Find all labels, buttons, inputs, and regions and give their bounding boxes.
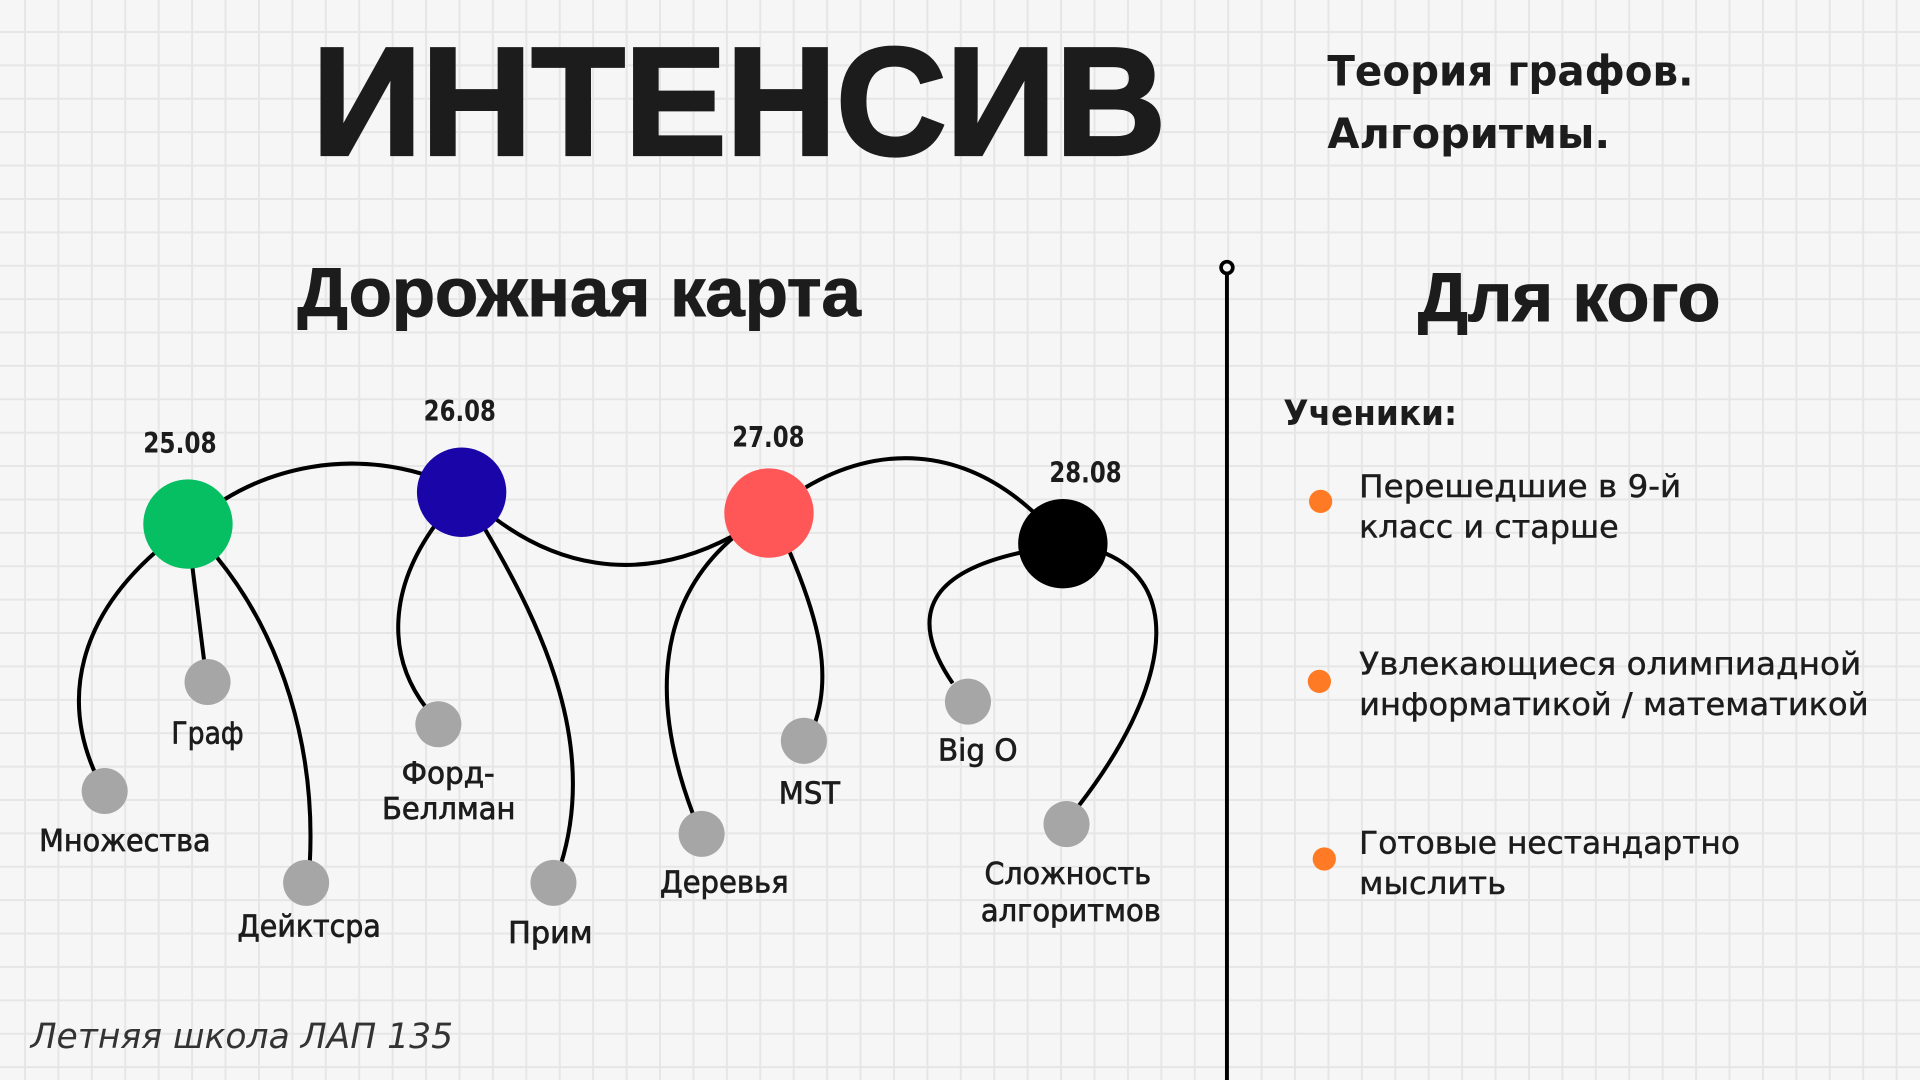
audience item 3: мыслить [1359,866,1506,902]
node: 26.08: 26.08 [424,395,496,428]
topic: Множества [39,768,211,859]
topic: Деревья [660,811,789,901]
topic: Прим: Прим [508,916,593,951]
topic: Деревья: Деревья [660,866,789,901]
audience item 2 [1308,647,1869,723]
title: ИНТЕНСИВ [312,16,1166,187]
audience item 2: Увлекающиеся олимпиадной [1359,647,1861,683]
topic: Сложность алгоритмов: Сложность [984,857,1151,892]
audience item 2: информатикой / математикой [1359,687,1869,723]
subtitle: Теория графов. [1327,47,1693,96]
audience heading: Ученики: [1283,394,1457,434]
node: 28.08: 28.08 [1049,456,1122,489]
edges to topics [79,524,1156,864]
vertical divider with ring [1221,262,1233,1080]
node: 25.08: 25.08 [143,427,217,460]
node: 27.08 [724,421,814,558]
topic: MST [779,718,841,811]
topic: Граф [171,659,244,751]
footer: Летняя школа ЛАП 135 [29,1017,453,1057]
audience item 1 [1309,469,1681,546]
roadmap graph [39,395,1161,951]
topic: Форд-Беллман [382,701,516,827]
topic: Дейктсра [238,860,381,945]
topic: Форд-Беллман: Беллман [382,792,516,827]
audience item 3 [1313,825,1740,902]
node: 27.08: 27.08 [732,421,804,454]
subtitle: Алгоритмы. [1327,109,1610,158]
topic: Сложность алгоритмов [981,801,1161,929]
topic: Big O: Big O [938,733,1018,768]
audience item 1: класс и старше [1359,510,1619,546]
audience item 3: Готовые нестандартно [1359,825,1740,861]
topic: Дейктсра: Дейктсра [238,910,381,945]
topic: Прим [508,860,593,951]
audience item 1: Перешедшие в 9-й [1359,469,1681,505]
topic: Big O [938,679,1018,768]
topic: Множества: Множества [39,824,211,859]
topic: Сложность алгоритмов: алгоритмов [981,894,1161,929]
edges between day nodes [224,458,1037,565]
topic: Граф: Граф [171,716,244,751]
subtitle [1327,47,1693,158]
node: 25.08 [143,427,233,569]
heading: roadmap: Дорожная карта [298,254,862,331]
heading: for whom: Для кого [1418,259,1720,336]
topic: MST: MST [779,776,841,811]
node: 26.08 [417,395,506,537]
node: 28.08 [1018,456,1122,588]
topic: Форд-Беллман: Форд- [402,757,495,792]
